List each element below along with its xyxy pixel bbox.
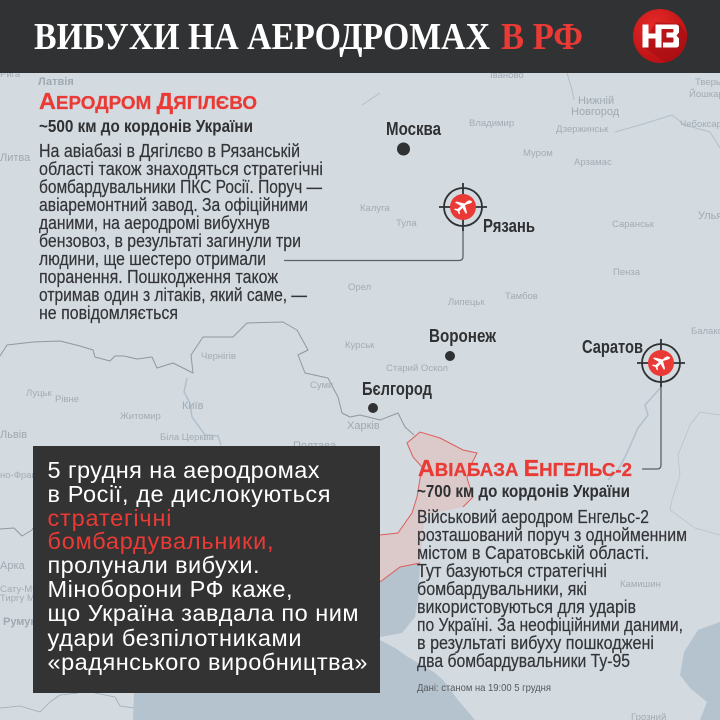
small map labels: Біла Церква — [160, 432, 215, 443]
description: два бомбардувальники Ту-95 — [417, 651, 630, 671]
description: бомбардувальники ПКС Росії. Поруч — — [39, 177, 322, 197]
description: людини, ще шестеро отримали — [39, 249, 266, 269]
description: отримав один з літаків, який саме, — — [39, 285, 307, 305]
small map labels: Арзамас — [574, 157, 612, 168]
title bar — [0, 0, 720, 73]
title accent: В РФ — [501, 16, 583, 58]
small map labels: Калуга — [360, 203, 390, 214]
small map labels: Суми — [310, 380, 333, 391]
small map labels: Владимир — [469, 118, 514, 129]
description: авіаремонтний завод. За офіційними — [39, 195, 308, 215]
small map labels: Камишин — [620, 579, 661, 590]
small map labels: Латвія — [38, 76, 74, 88]
panel: summary: в Росії, де дислокуються — [48, 481, 330, 507]
description: в результаті вибуху пошкоджені — [417, 633, 654, 653]
small map labels: Саранськ — [612, 219, 655, 230]
occupied territory — [380, 432, 477, 582]
rivers and lakes — [184, 73, 720, 480]
small map labels: Житомир — [120, 411, 161, 422]
panel: summary: «радянського виробництва» — [48, 649, 368, 675]
connector: Ryazan — [284, 228, 463, 260]
small map labels: Курськ — [345, 340, 375, 351]
description: використовуються для ударів — [417, 597, 636, 617]
icon: target Ryazan — [439, 183, 487, 231]
small map labels: Полтава — [293, 440, 337, 452]
city: Belgorod: Бєлгород — [362, 379, 432, 399]
small map labels: Старий Оскол — [386, 363, 448, 374]
small map labels: Київ — [182, 400, 204, 412]
description: містом в Саратовській області. — [417, 543, 649, 563]
distance: ~500 км до кордонів України — [39, 116, 253, 136]
small map labels: Пенза — [613, 267, 641, 278]
small map labels: Харків — [347, 420, 380, 432]
description: не повідомляється — [39, 303, 178, 323]
small map labels: Луцьк — [26, 388, 52, 399]
occupied border — [380, 432, 477, 582]
description: бензовоз, в результаті загинули три — [39, 231, 301, 251]
small map labels: Румунія — [3, 616, 47, 628]
small map labels: Тамбов — [505, 291, 538, 302]
small map labels: Тула — [396, 218, 417, 229]
heading: АЕРОДРОМ ДЯГІЛЄВО — [39, 88, 257, 114]
panel: summary: стратегічні — [48, 505, 172, 531]
city: Moscow — [386, 119, 442, 156]
small map labels: Рига — [0, 69, 21, 80]
description: по Україні. За неофіційними даними, — [417, 615, 683, 635]
city: Voronezh: Воронеж — [429, 326, 496, 346]
label: Saratov: Саратов — [582, 337, 643, 357]
small map labels: Дзержинськ — [556, 124, 609, 135]
small map labels: Арка — [0, 560, 26, 572]
small map labels: Орел — [348, 282, 371, 293]
small map labels: Липецьк — [448, 297, 485, 308]
source note: Дані: станом на 19:00 5 грудня — [417, 682, 551, 694]
panel: summary: удари безпілотниками — [48, 625, 302, 651]
panel: summary: Міноборони РФ каже, — [48, 576, 292, 602]
block: Engels-2 airbase — [417, 455, 687, 694]
panel: summary: пролунали вибухи. — [48, 552, 260, 578]
small map labels: Нижній — [578, 95, 614, 107]
title: ВИБУХИ НА АЕРОДРОМАХ — [34, 16, 490, 58]
panel: summary: що Україна завдала по ним — [48, 600, 358, 626]
description: даними, на аеродромі вибухнув — [39, 213, 270, 233]
state borders — [0, 322, 720, 712]
small map labels: но-Франківськ — [0, 470, 63, 481]
heading: АВІАБАЗА ЕНГЕЛЬС-2 — [418, 455, 632, 481]
logo — [633, 9, 687, 63]
description: На авіабазі в Дягілєво в Рязанській — [39, 141, 300, 161]
city: Moscow: Москва — [386, 119, 442, 139]
small map labels: Рівне — [55, 394, 79, 405]
description: розташований поруч з однойменним — [417, 525, 687, 545]
icon: target Saratov — [637, 339, 685, 387]
description: Тут базуються стратегічні — [417, 561, 607, 581]
description — [39, 141, 323, 323]
small map labels: Новгород — [571, 106, 620, 118]
connector: Saratov — [642, 384, 661, 469]
small map labels: Муром — [523, 148, 553, 159]
seas — [133, 563, 475, 720]
small map labels: Сату-Муреш — [0, 584, 55, 595]
description: Військовий аеродром Енгельс-2 — [417, 507, 649, 527]
small map labels: Тиргу Муреш — [0, 593, 58, 604]
block: Dyagilevo airfield — [39, 88, 323, 323]
city: Voronezh — [429, 326, 496, 361]
panel: summary: бомбардувальники, — [48, 528, 274, 554]
small map labels: Львів — [0, 429, 27, 441]
panel: summary — [33, 446, 380, 693]
small map labels: Литва — [0, 152, 31, 164]
panel: summary: 5 грудня на аеродромах — [48, 457, 320, 483]
label: Ryazan: Рязань — [483, 216, 535, 236]
small map labels: Іваново — [490, 70, 524, 81]
description: області також знаходяться стратегічні — [39, 159, 323, 179]
description: поранення. Пошкодження також — [39, 267, 278, 287]
description: бомбардувальники, які — [417, 579, 587, 599]
small map labels: Чернігів — [201, 351, 236, 362]
distance: ~700 км до кордонів України — [417, 481, 630, 501]
city: Belgorod — [362, 379, 432, 413]
description — [417, 507, 687, 671]
